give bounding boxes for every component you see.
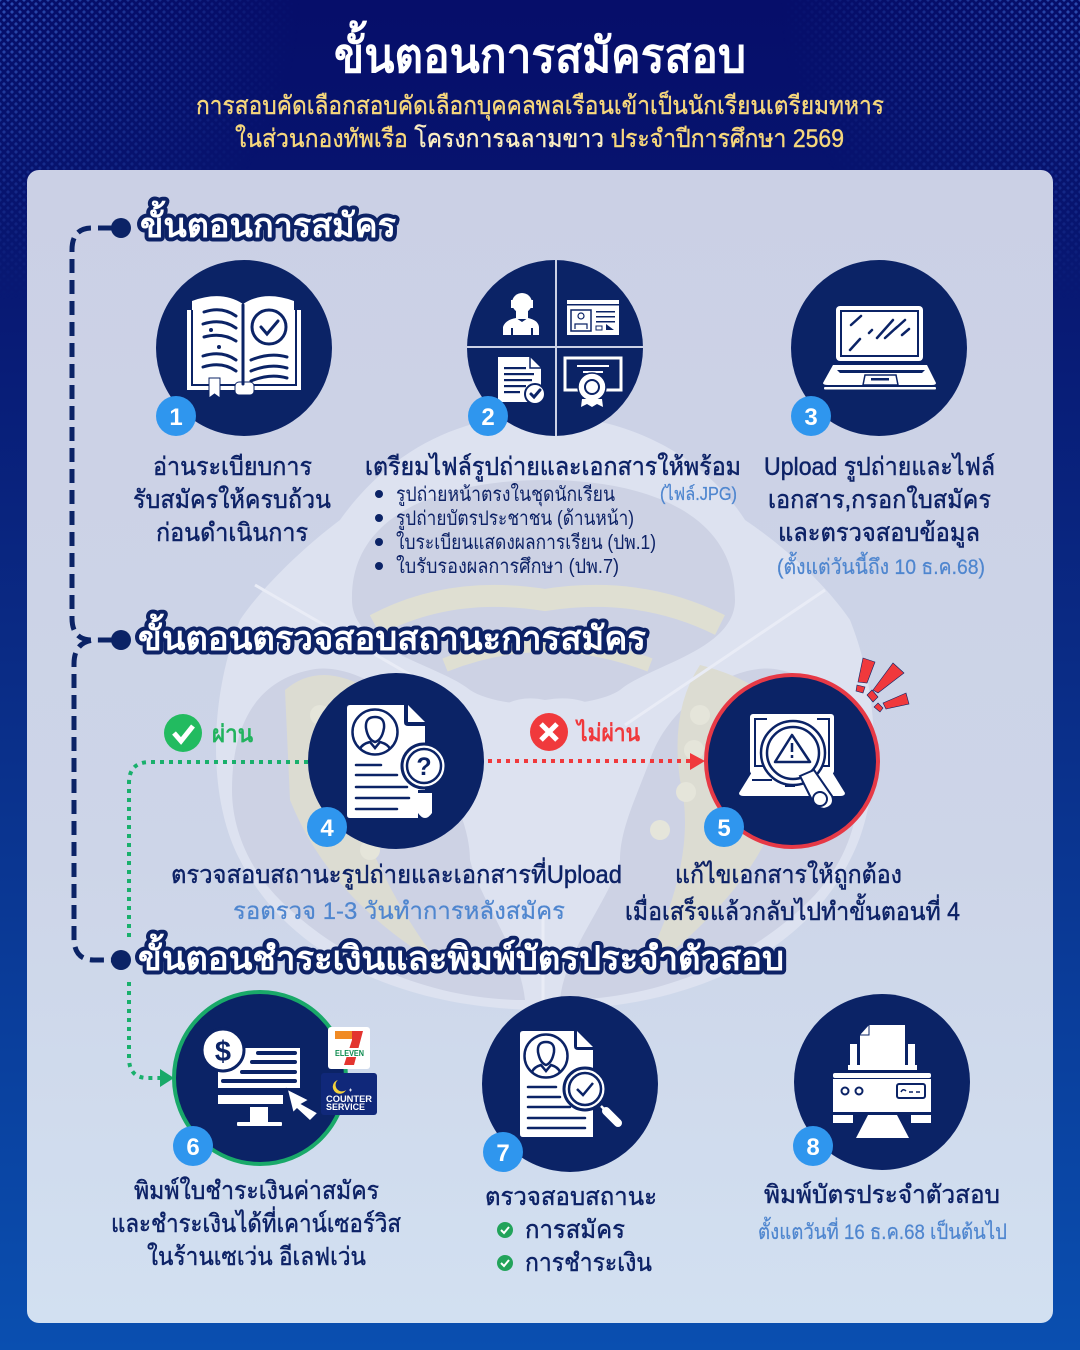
badge 8 <box>793 1126 833 1166</box>
header <box>196 20 884 153</box>
heading: payment and print: ขั้นตอนชำระเงินและพิมพ์บัตรประจำตัวสอบ <box>138 933 784 978</box>
icon: document with question magnifier <box>308 673 484 849</box>
arrow: fail path <box>488 759 692 763</box>
arrow head: fail <box>690 753 705 770</box>
list: required documents: รูปถ่ายบัตรประชาชน (ด้านหน้า) <box>396 508 634 531</box>
step 3 <box>764 260 995 579</box>
badge 1: 1 <box>169 404 183 431</box>
icon: printer <box>794 994 970 1170</box>
icon: payment monitor <box>174 992 346 1164</box>
step 2 <box>365 260 741 578</box>
text: step 4: รอตรวจ 1-3 วันทำการหลังสมัคร <box>233 898 565 925</box>
badge 2 <box>468 396 508 436</box>
badge 3 <box>791 396 831 436</box>
text: step 1: อ่านระเบียบการ <box>153 453 312 481</box>
text: step 3: และตรวจสอบข้อมูล <box>778 519 980 548</box>
list: required documents: ใบระเบียนแสดงผลการเรียน (ปพ.1) <box>396 531 656 554</box>
label: pass <box>164 714 254 752</box>
text: step 8: พิมพ์บัตรประจำตัวสอบ <box>764 1181 1000 1209</box>
text: step 5: แก้ไขเอกสารให้ถูกต้อง <box>675 860 902 890</box>
step 4 <box>171 673 622 925</box>
watermark emblem <box>216 415 874 1040</box>
badge 7: 7 <box>496 1140 510 1167</box>
text: step 8 <box>758 1181 1007 1244</box>
text: step 1 <box>133 453 331 547</box>
heading: check status: ขั้นตอนตรวจสอบสถานะการสมัคร <box>138 613 647 658</box>
icon: alert marks <box>856 658 909 712</box>
logo: Counter Service: SERVICE <box>326 1102 365 1113</box>
halftone pattern right <box>818 0 1080 258</box>
list: required documents <box>375 483 656 578</box>
text: step 5 <box>625 860 960 926</box>
logo: Counter Service <box>321 1073 377 1115</box>
step 7 <box>482 996 658 1277</box>
text: step 1: รับสมัครให้ครบถ้วน <box>133 485 331 514</box>
halftone pattern left <box>0 0 262 258</box>
text: step 7: การชำระเงิน <box>525 1249 652 1277</box>
subtitle line 2: ในส่วนกองทัพเรือ โครงการฉลามขาว ประจำปีการศึกษา 2569 <box>235 124 844 153</box>
text: step 8: ตั้งแตวันที่ 16 ธ.ค.68 เป็นต้นไป <box>758 1217 1007 1244</box>
text: step 6: ในร้านเซเว่น อีเลฟเว่น <box>147 1242 366 1271</box>
text: step 6: และชำระเงินได้ที่เคาน์เซอร์วิส <box>111 1206 401 1238</box>
badge 5 <box>704 807 744 847</box>
label: fail <box>530 713 641 751</box>
logo: 7-Eleven <box>328 1027 370 1069</box>
badge 3: 3 <box>804 404 818 431</box>
step 6 <box>111 992 401 1271</box>
subtitle line 1: การสอบคัดเลือกสอบคัดเลือกบุคคลพลเรือนเข้าเป็นนักเรียนเตรียมทหาร <box>196 90 884 121</box>
heading: application steps: ขั้นตอนการสมัคร <box>140 200 397 245</box>
icon: payment monitor: $ <box>215 1036 231 1068</box>
badge 5: 5 <box>717 815 731 842</box>
icon: four document quadrants <box>467 260 643 436</box>
text: step 3 <box>764 452 995 579</box>
logo: Counter Service: COUNTER <box>326 1094 372 1105</box>
badge 2: 2 <box>481 404 495 431</box>
icon: open book <box>156 260 332 436</box>
text: step 6: พิมพ์ใบชำระเงินค่าสมัคร <box>134 1176 379 1205</box>
text: step 4: ตรวจสอบสถานะรูปถ่ายและเอกสารที่Upload <box>171 857 622 890</box>
text: step 1: ก่อนดำเนินการ <box>156 519 308 547</box>
label: pass: ผ่าน <box>212 721 254 748</box>
text: file type note: (ไฟล์.JPG) <box>660 483 737 504</box>
icon: document check magnifier <box>482 996 658 1172</box>
timeline dots <box>111 218 131 970</box>
list: required documents: ใบรับรองผลการศึกษา (ปพ.7) <box>396 555 619 578</box>
step 1 <box>133 260 332 547</box>
logo: 7-Eleven: ELEVEN <box>335 1049 364 1058</box>
text: step 3: Upload รูปถ่ายและไฟล์ <box>764 452 995 482</box>
list: required documents: รูปถ่ายหน้าตรงในชุดนักเรียน <box>396 483 615 507</box>
badge 7 <box>483 1132 523 1172</box>
badge 1 <box>156 396 196 436</box>
icon: laptop warning <box>706 675 878 847</box>
label: fail: ไม่ผ่าน <box>574 718 641 747</box>
icon: laptop <box>791 260 967 436</box>
arrow head: pass <box>160 1069 174 1087</box>
badge 6: 6 <box>186 1134 200 1161</box>
arrow: pass path <box>129 762 308 1078</box>
badge 8: 8 <box>806 1134 820 1161</box>
section connector: dashed timeline <box>72 228 112 960</box>
text: step 7: ตรวจสอบสถานะ <box>485 1183 657 1211</box>
text: step 3: เอกสาร,กรอกใบสมัคร <box>768 485 991 514</box>
text: step 7: การสมัคร <box>525 1216 625 1244</box>
text: step 4 <box>171 857 622 925</box>
icon: document with question magnifier: ? <box>416 753 432 781</box>
step 8 <box>758 994 1007 1244</box>
badge 4 <box>307 807 347 847</box>
text: step 6 <box>111 1176 401 1271</box>
text: step 2 heading: เตรียมไฟล์รูปถ่ายและเอกสารให้พร้อม <box>365 452 741 482</box>
text: step 7 <box>485 1183 657 1277</box>
title: ขั้นตอนการสมัครสอบ <box>334 20 746 83</box>
text: step 5: เมื่อเสร็จแล้วกลับไปทำขั้นตอนที่ 4 <box>625 893 960 926</box>
badge 6 <box>173 1126 213 1166</box>
text: step 3: (ตั้งแต่วันนี้ถึง 10 ธ.ค.68) <box>777 552 985 579</box>
badge 4: 4 <box>320 815 334 842</box>
step 5 <box>625 658 960 926</box>
